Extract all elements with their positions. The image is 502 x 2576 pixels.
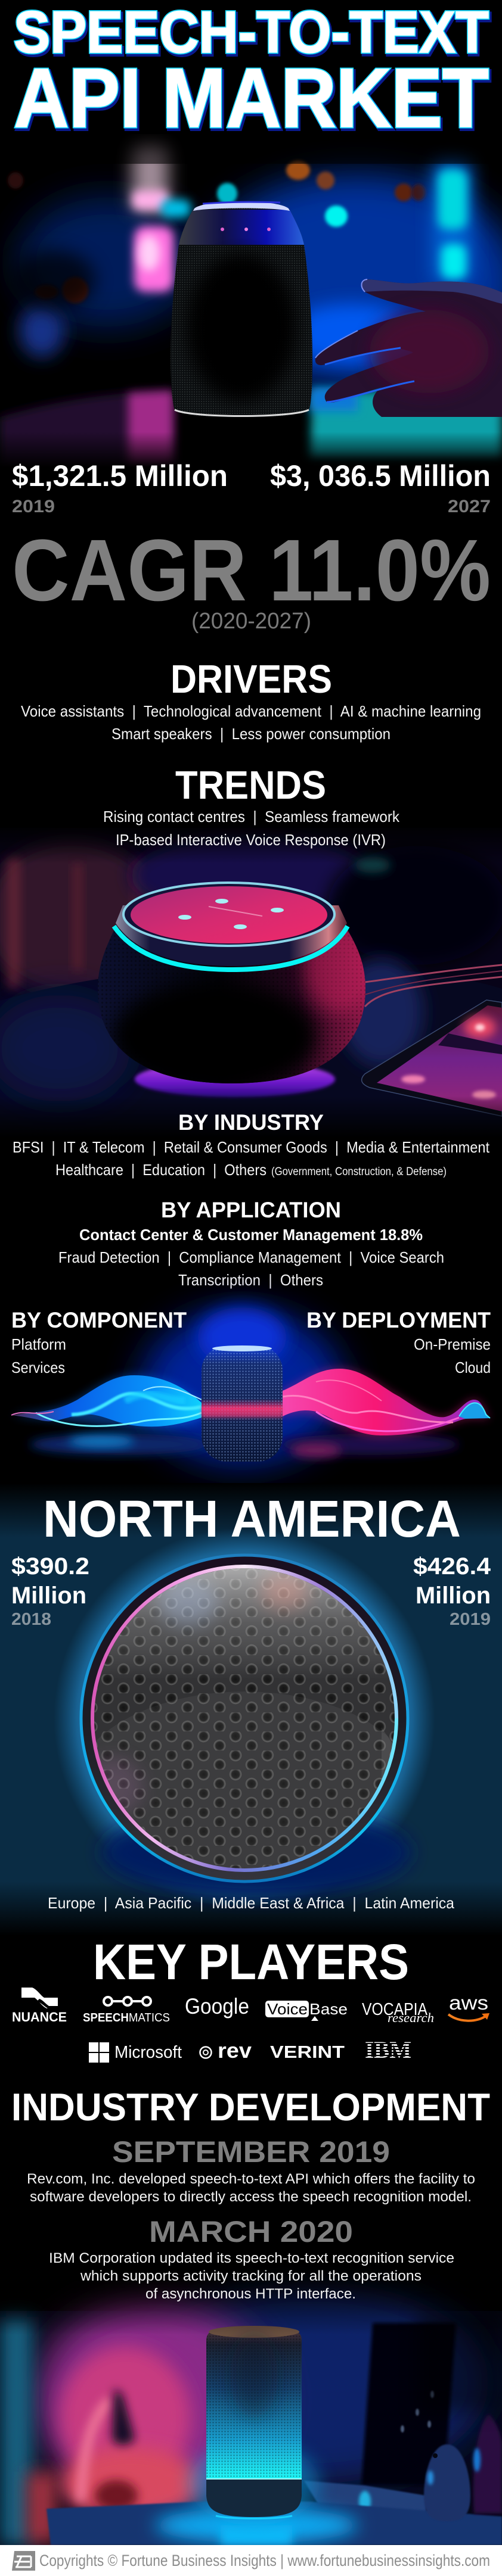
- market size 2027: $3, 036.5 Million: [270, 459, 491, 493]
- left blue wave: [11, 1375, 202, 1429]
- trends heading: TRENDS: [175, 763, 326, 808]
- development: March 2020: which supports activity tracking for all the operations: [80, 2268, 422, 2284]
- logo: AWS: aws: [449, 1992, 488, 2014]
- by application list: Contact Center & Customer Management 18.8%: [79, 1226, 423, 1244]
- trends image: round speaker with phone: [0, 822, 502, 1138]
- trends list: IP-based Interactive Voice Response (IVR): [116, 831, 386, 849]
- development: March 2020: [49, 2215, 454, 2302]
- cylinder speaker: [202, 1345, 283, 1462]
- drivers list: Voice assistants | Technological advancement | AI & machine learning: [21, 702, 481, 720]
- logo: Rev: rev: [218, 2038, 252, 2063]
- by component panel: BY COMPONENT: [11, 1308, 187, 1332]
- speaker body: [171, 201, 312, 418]
- trends list: Rising contact centres | Seamless framework: [103, 808, 400, 826]
- by component panel: Platform: [11, 1335, 66, 1353]
- market size 2019: $1,321.5 Million: [12, 459, 228, 493]
- drivers list: [21, 702, 481, 743]
- logo: Speechmatics: [83, 1997, 170, 2024]
- logo: Nuance: NUANCE: [12, 2010, 67, 2024]
- base glow: [135, 1061, 335, 1097]
- by deployment panel: [306, 1308, 491, 1376]
- market size 2027: 2027: [448, 497, 491, 516]
- by application list: Transcription | Others: [178, 1271, 323, 1289]
- lamp silhouette: [80, 2388, 138, 2511]
- north america 2018 value: $390.2: [11, 1553, 89, 1580]
- north america 2019 value: $426.4: [413, 1553, 491, 1580]
- by industry list: (Government, Construction, & Defense): [271, 1166, 447, 1178]
- logo: VoiceBase: Voice: [267, 2000, 308, 2018]
- market size 2019: 2019: [12, 497, 55, 516]
- north america 2019 value: 2019: [450, 1610, 491, 1629]
- sound wave speaker image: [11, 1307, 490, 1465]
- title: [14, 0, 490, 147]
- market size 2027: [270, 459, 491, 516]
- glowing speaker: [188, 2326, 320, 2525]
- north america 2018 value: [11, 1553, 89, 1629]
- by deployment panel: BY DEPLOYMENT: [306, 1308, 491, 1332]
- development: March 2020: of asynchronous HTTP interface.: [145, 2286, 356, 2302]
- key players heading: KEY PLAYERS: [93, 1934, 409, 1990]
- logo: Vocapia Research: VOCAPIA: [362, 2000, 428, 2019]
- logo: Nuance: [12, 1988, 67, 2024]
- right pink wave: [283, 1369, 490, 1437]
- by industry heading: BY INDUSTRY: [178, 1110, 324, 1135]
- development: September 2019: SEPTEMBER 2019: [112, 2135, 390, 2169]
- regional panel background: [0, 1483, 502, 1936]
- by application list: [58, 1226, 444, 1289]
- bottom image: cylinder speaker on desk: [0, 2263, 502, 2545]
- desk: [47, 2502, 502, 2545]
- metal band: [116, 905, 347, 966]
- CAGR period: (2020-2027): [191, 609, 311, 634]
- drivers list: Smart speakers | Less power consumption: [111, 725, 391, 743]
- logo: Microsoft: [89, 2042, 182, 2063]
- by application heading: BY APPLICATION: [161, 1198, 341, 1222]
- north america heading: NORTH AMERICA: [43, 1490, 461, 1548]
- cables: [365, 965, 502, 1007]
- logo: Microsoft: Microsoft: [114, 2043, 182, 2062]
- market size 2019: [12, 459, 228, 516]
- north america 2019 value: Million: [416, 1583, 491, 1609]
- by component panel: [11, 1308, 187, 1376]
- hero image: smart speaker and hand: [0, 134, 502, 471]
- logo: Google: Google: [185, 1994, 249, 2019]
- by industry list: Healthcare | Education | Others: [55, 1161, 267, 1179]
- footer bar: [0, 2545, 502, 2576]
- development: March 2020: IBM Corporation updated its speech-to-text recognition service: [49, 2250, 454, 2266]
- sphere: [98, 929, 365, 1083]
- touch disk: [131, 886, 327, 943]
- logo: VoiceBase: Base: [309, 2000, 348, 2018]
- egg ornament: [424, 2414, 502, 2521]
- development: September 2019: software developers to directly access the speech recognition model.: [30, 2189, 472, 2205]
- logo: VoiceBase: [265, 2000, 348, 2021]
- drivers heading: DRIVERS: [171, 657, 332, 702]
- top rim: [123, 883, 334, 946]
- north america speaker grille: [54, 1528, 435, 1909]
- logo: IBM: IBM: [365, 2036, 411, 2063]
- hand: [315, 279, 502, 417]
- logo: Vocapia Research: research: [388, 2010, 434, 2025]
- logo: Speechmatics: SPEECHMATICS: [83, 2011, 170, 2024]
- by component panel: Services: [11, 1359, 65, 1376]
- laptop: [304, 2323, 456, 2516]
- by deployment panel: On-Premise: [414, 1335, 491, 1353]
- table: [29, 971, 448, 998]
- phone: [362, 1000, 502, 1116]
- by application list: Fraud Detection | Compliance Management | Voice Search: [58, 1248, 444, 1266]
- development: March 2020: MARCH 2020: [149, 2215, 353, 2248]
- by deployment panel: Cloud: [455, 1359, 491, 1376]
- development: September 2019: Rev.com, Inc. developed speech-to-text API which offers the facility to: [27, 2171, 475, 2187]
- by industry list: [13, 1138, 490, 1179]
- other regions: Europe | Asia Pacific | Middle East & Africa | Latin America: [48, 1894, 455, 1912]
- north america 2018 value: Million: [11, 1583, 86, 1609]
- north america 2018 value: 2018: [11, 1610, 51, 1629]
- north america 2019 value: [413, 1553, 491, 1629]
- cyan ring: [114, 926, 348, 970]
- icon: Fortune Business Insights logo: [12, 2551, 35, 2571]
- logo: AWS: [448, 1992, 489, 2021]
- industry development heading: INDUSTRY DEVELOPMENT: [11, 2085, 490, 2129]
- trends list: [103, 808, 400, 849]
- table surface glow: [0, 387, 502, 471]
- logo: Rev: [200, 2038, 252, 2063]
- logo: Verint: VERINT: [270, 2043, 345, 2062]
- development: September 2019: [27, 2135, 475, 2205]
